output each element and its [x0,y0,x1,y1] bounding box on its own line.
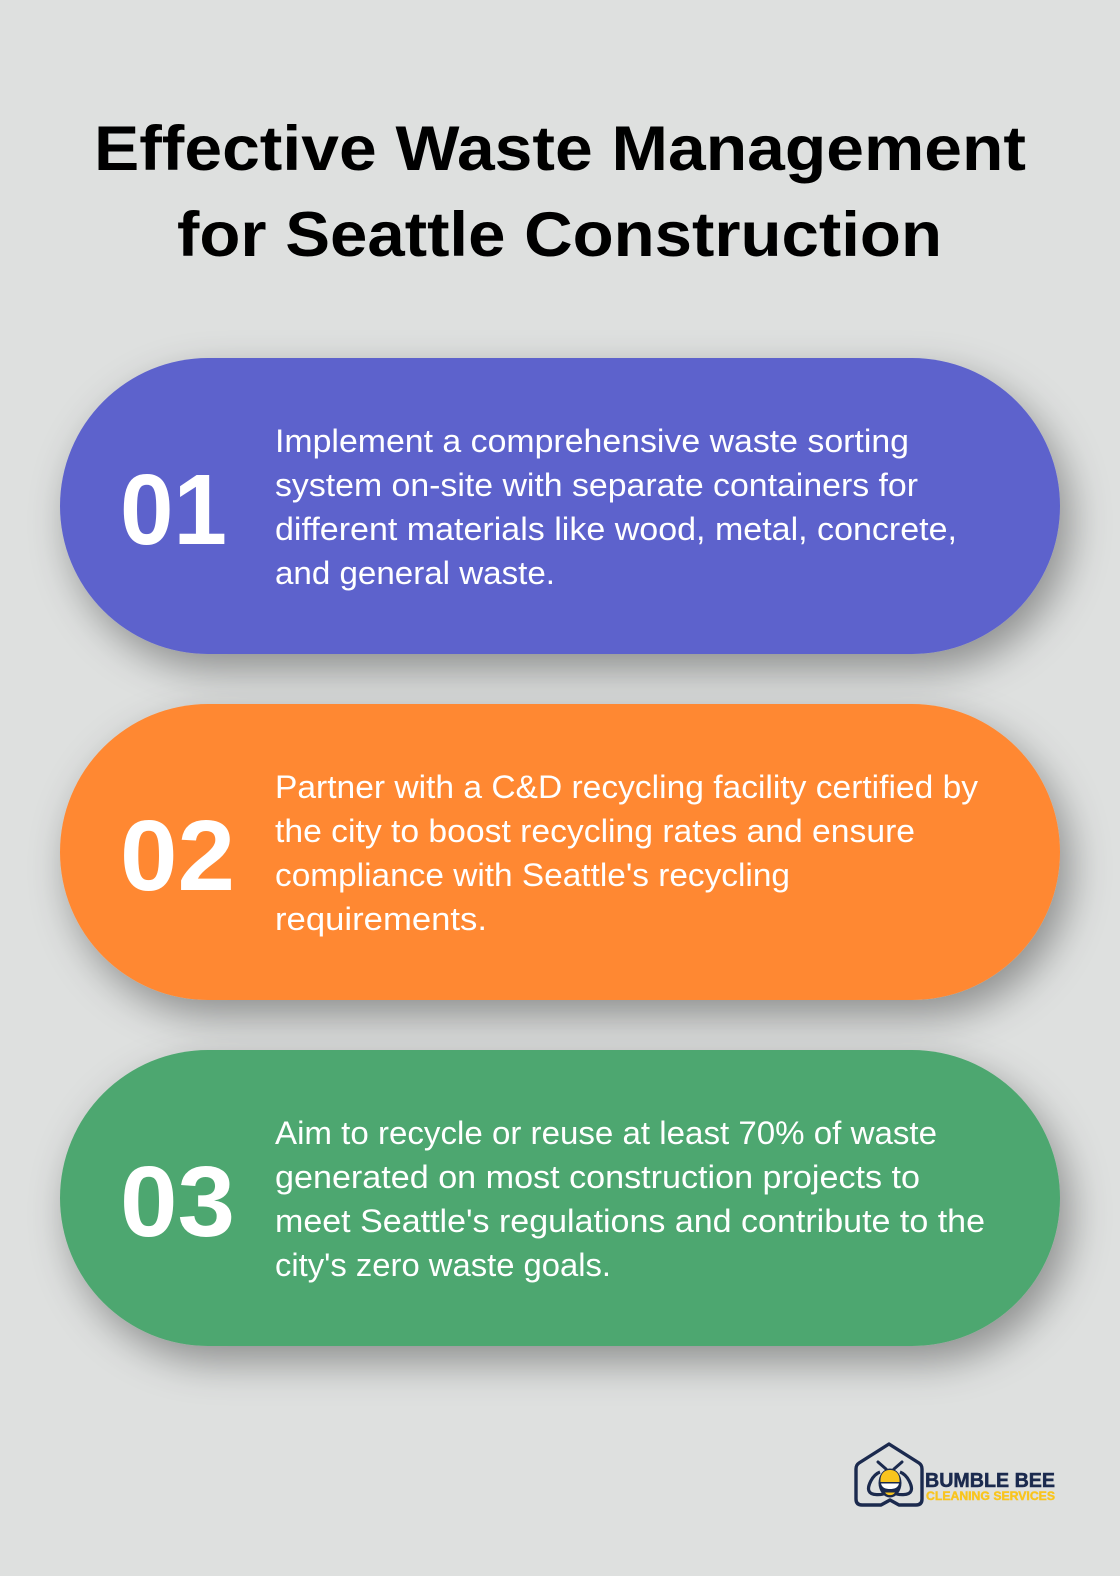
text block: step 02: the city to boost recycling rates and ensure [275,813,915,849]
panel: step 01 [60,358,1060,654]
text block: step 02: compliance with Seattle's recycling [275,857,790,893]
title [94,114,1026,270]
text block: step 03 [275,1115,985,1283]
text block: step 03: generated on most construction projects to [275,1159,920,1195]
number 03: 03 [120,1146,235,1258]
number 02: 02 [120,800,235,912]
text block: step 01: different materials like wood, metal, concrete, [275,511,957,547]
logo: Bumble Bee Cleaning Services [856,1444,1055,1505]
text block: step 03: city's zero waste goals. [275,1247,611,1283]
text block: step 02: requirements. [275,901,487,937]
text block: step 01: Implement a comprehensive waste sorting [275,423,909,459]
icon: bee [869,1462,911,1498]
text block: step 03: meet Seattle's regulations and contribute to the [275,1203,985,1239]
text block: step 02 [275,769,978,937]
icon: house outline [856,1444,922,1505]
title: Effective Waste Management [94,114,1026,184]
text block: step 01: system on-site with separate containers for [275,467,918,503]
title: for Seattle Construction [177,200,942,270]
panel: step 02 [60,704,1060,1000]
text block: step 01 [275,423,957,591]
logo wordmark: BUMBLE BEE [925,1470,1055,1492]
text block: step 03: Aim to recycle or reuse at least 70% of waste [275,1115,937,1151]
panel: step 03 [60,1050,1060,1346]
number 01: 01 [120,454,227,566]
text block: step 01: and general waste. [275,555,555,591]
text block: step 02: Partner with a C&D recycling facility certified by [275,769,978,805]
logo tagline: CLEANING SERVICES [926,1491,1055,1503]
